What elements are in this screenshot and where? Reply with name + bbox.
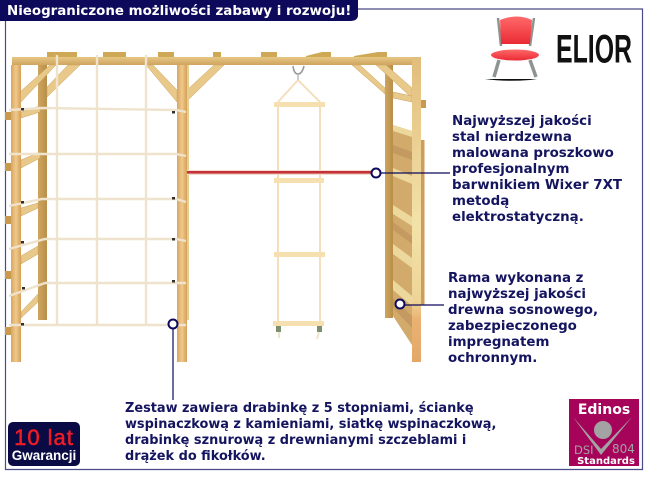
callout: steel bar — [372, 113, 623, 225]
callout: wooden frame: najwyższej jakości — [448, 286, 586, 302]
callout: wooden frame: ochronnym. — [448, 351, 537, 366]
callout: set contents: drążek do fikołków. — [125, 449, 266, 464]
warranty badge — [8, 422, 80, 466]
callout: wooden frame: drewna sosnowego, — [448, 303, 598, 318]
side blocks — [5, 100, 426, 335]
callout: steel bar: malowana proszkowo — [452, 146, 614, 161]
callout: wooden frame: Rama wykonana z — [448, 271, 584, 286]
callout: steel bar: stal nierdzewna — [452, 130, 572, 145]
callout: wooden frame: impregnatem — [448, 335, 549, 350]
callout: steel bar: metodą — [452, 194, 509, 209]
illustration: wooden play frame — [5, 52, 426, 362]
Edinos standards badge — [569, 399, 639, 467]
callout: wooden frame — [396, 271, 598, 366]
callout: steel bar: elektrostatyczną. — [452, 210, 584, 225]
title banner — [0, 0, 358, 21]
title banner: Nieograniczone możliwości zabawy i rozwoju! — [7, 3, 351, 19]
warranty badge: 10 lat — [14, 425, 74, 450]
callout: set contents: wspinaczkową z kamieniami, siatkę wspinaczkową, — [125, 417, 496, 432]
rope ladder — [273, 66, 325, 339]
red steel bar — [187, 170, 377, 175]
Edinos standards badge: 804 — [612, 442, 635, 456]
roof slats — [47, 52, 387, 58]
Edinos standards badge: Edinos — [578, 402, 630, 418]
callout: steel bar: barwnikiem Wixer 7XT — [452, 178, 623, 193]
callout: steel bar: profesjonalnym — [452, 162, 569, 177]
climbing wall — [393, 125, 412, 345]
front posts — [11, 65, 21, 362]
callout: set contents: Zestaw zawiera drabinkę z 5 stopniami, ściankę — [125, 401, 474, 416]
rope knots — [21, 108, 175, 326]
rear posts — [38, 65, 47, 320]
callout: set contents: drabinkę sznurową z drewnianymi szczeblami i — [125, 433, 466, 448]
braces — [20, 65, 412, 318]
callout: wooden frame: zabezpieczonego — [448, 319, 577, 334]
Edinos standards badge: Standards — [577, 456, 635, 467]
chair logo icon — [485, 16, 539, 81]
callout: steel bar: Najwyższej jakości — [452, 113, 592, 129]
rope net — [9, 55, 186, 326]
top beam — [12, 57, 413, 65]
callout: set contents — [125, 320, 496, 464]
warranty badge: Gwarancji — [12, 448, 76, 463]
Edinos standards badge: DSI — [574, 443, 594, 457]
